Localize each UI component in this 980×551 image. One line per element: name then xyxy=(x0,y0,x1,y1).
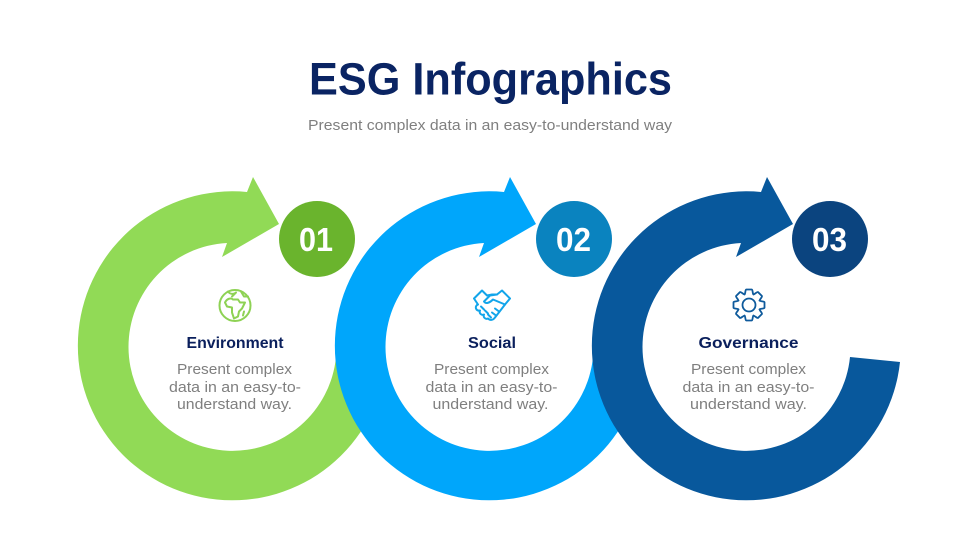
title: ESG Infographics xyxy=(309,54,672,104)
number badge 01: 01 xyxy=(299,221,333,258)
circular arrow: governance xyxy=(592,177,900,500)
description: governance: data in an easy-to- xyxy=(682,379,814,396)
panel: social xyxy=(335,177,643,500)
heading: governance: Governance xyxy=(698,335,799,352)
description: environment xyxy=(169,361,301,413)
circular arrow: social xyxy=(335,177,643,500)
number badge 02: 02 xyxy=(556,221,591,258)
description: environment: data in an easy-to- xyxy=(169,379,301,396)
description: social: understand way. xyxy=(432,396,548,413)
description: social: Present complex xyxy=(434,361,550,378)
number badge 01 xyxy=(279,201,355,277)
number badge 03 xyxy=(792,201,868,277)
description: social xyxy=(426,361,558,413)
panel: environment xyxy=(78,177,386,500)
description: governance: understand way. xyxy=(690,396,807,413)
circular arrow: environment xyxy=(78,177,386,500)
number badge 03: 03 xyxy=(812,221,847,258)
description: governance: Present complex xyxy=(691,361,807,378)
number badge 02 xyxy=(536,201,612,277)
description: environment: understand way. xyxy=(177,396,292,413)
icon: globe xyxy=(220,290,250,321)
heading: environment: Environment xyxy=(186,335,284,352)
description: environment: Present complex xyxy=(177,361,293,378)
heading: social: Social xyxy=(468,335,516,352)
panel: governance xyxy=(592,177,900,500)
icon: handshake xyxy=(474,290,510,320)
description: governance xyxy=(682,361,814,413)
icon: gear xyxy=(734,290,764,320)
subtitle: Present complex data in an easy-to-understand way xyxy=(308,117,673,134)
description: social: data in an easy-to- xyxy=(426,379,558,396)
